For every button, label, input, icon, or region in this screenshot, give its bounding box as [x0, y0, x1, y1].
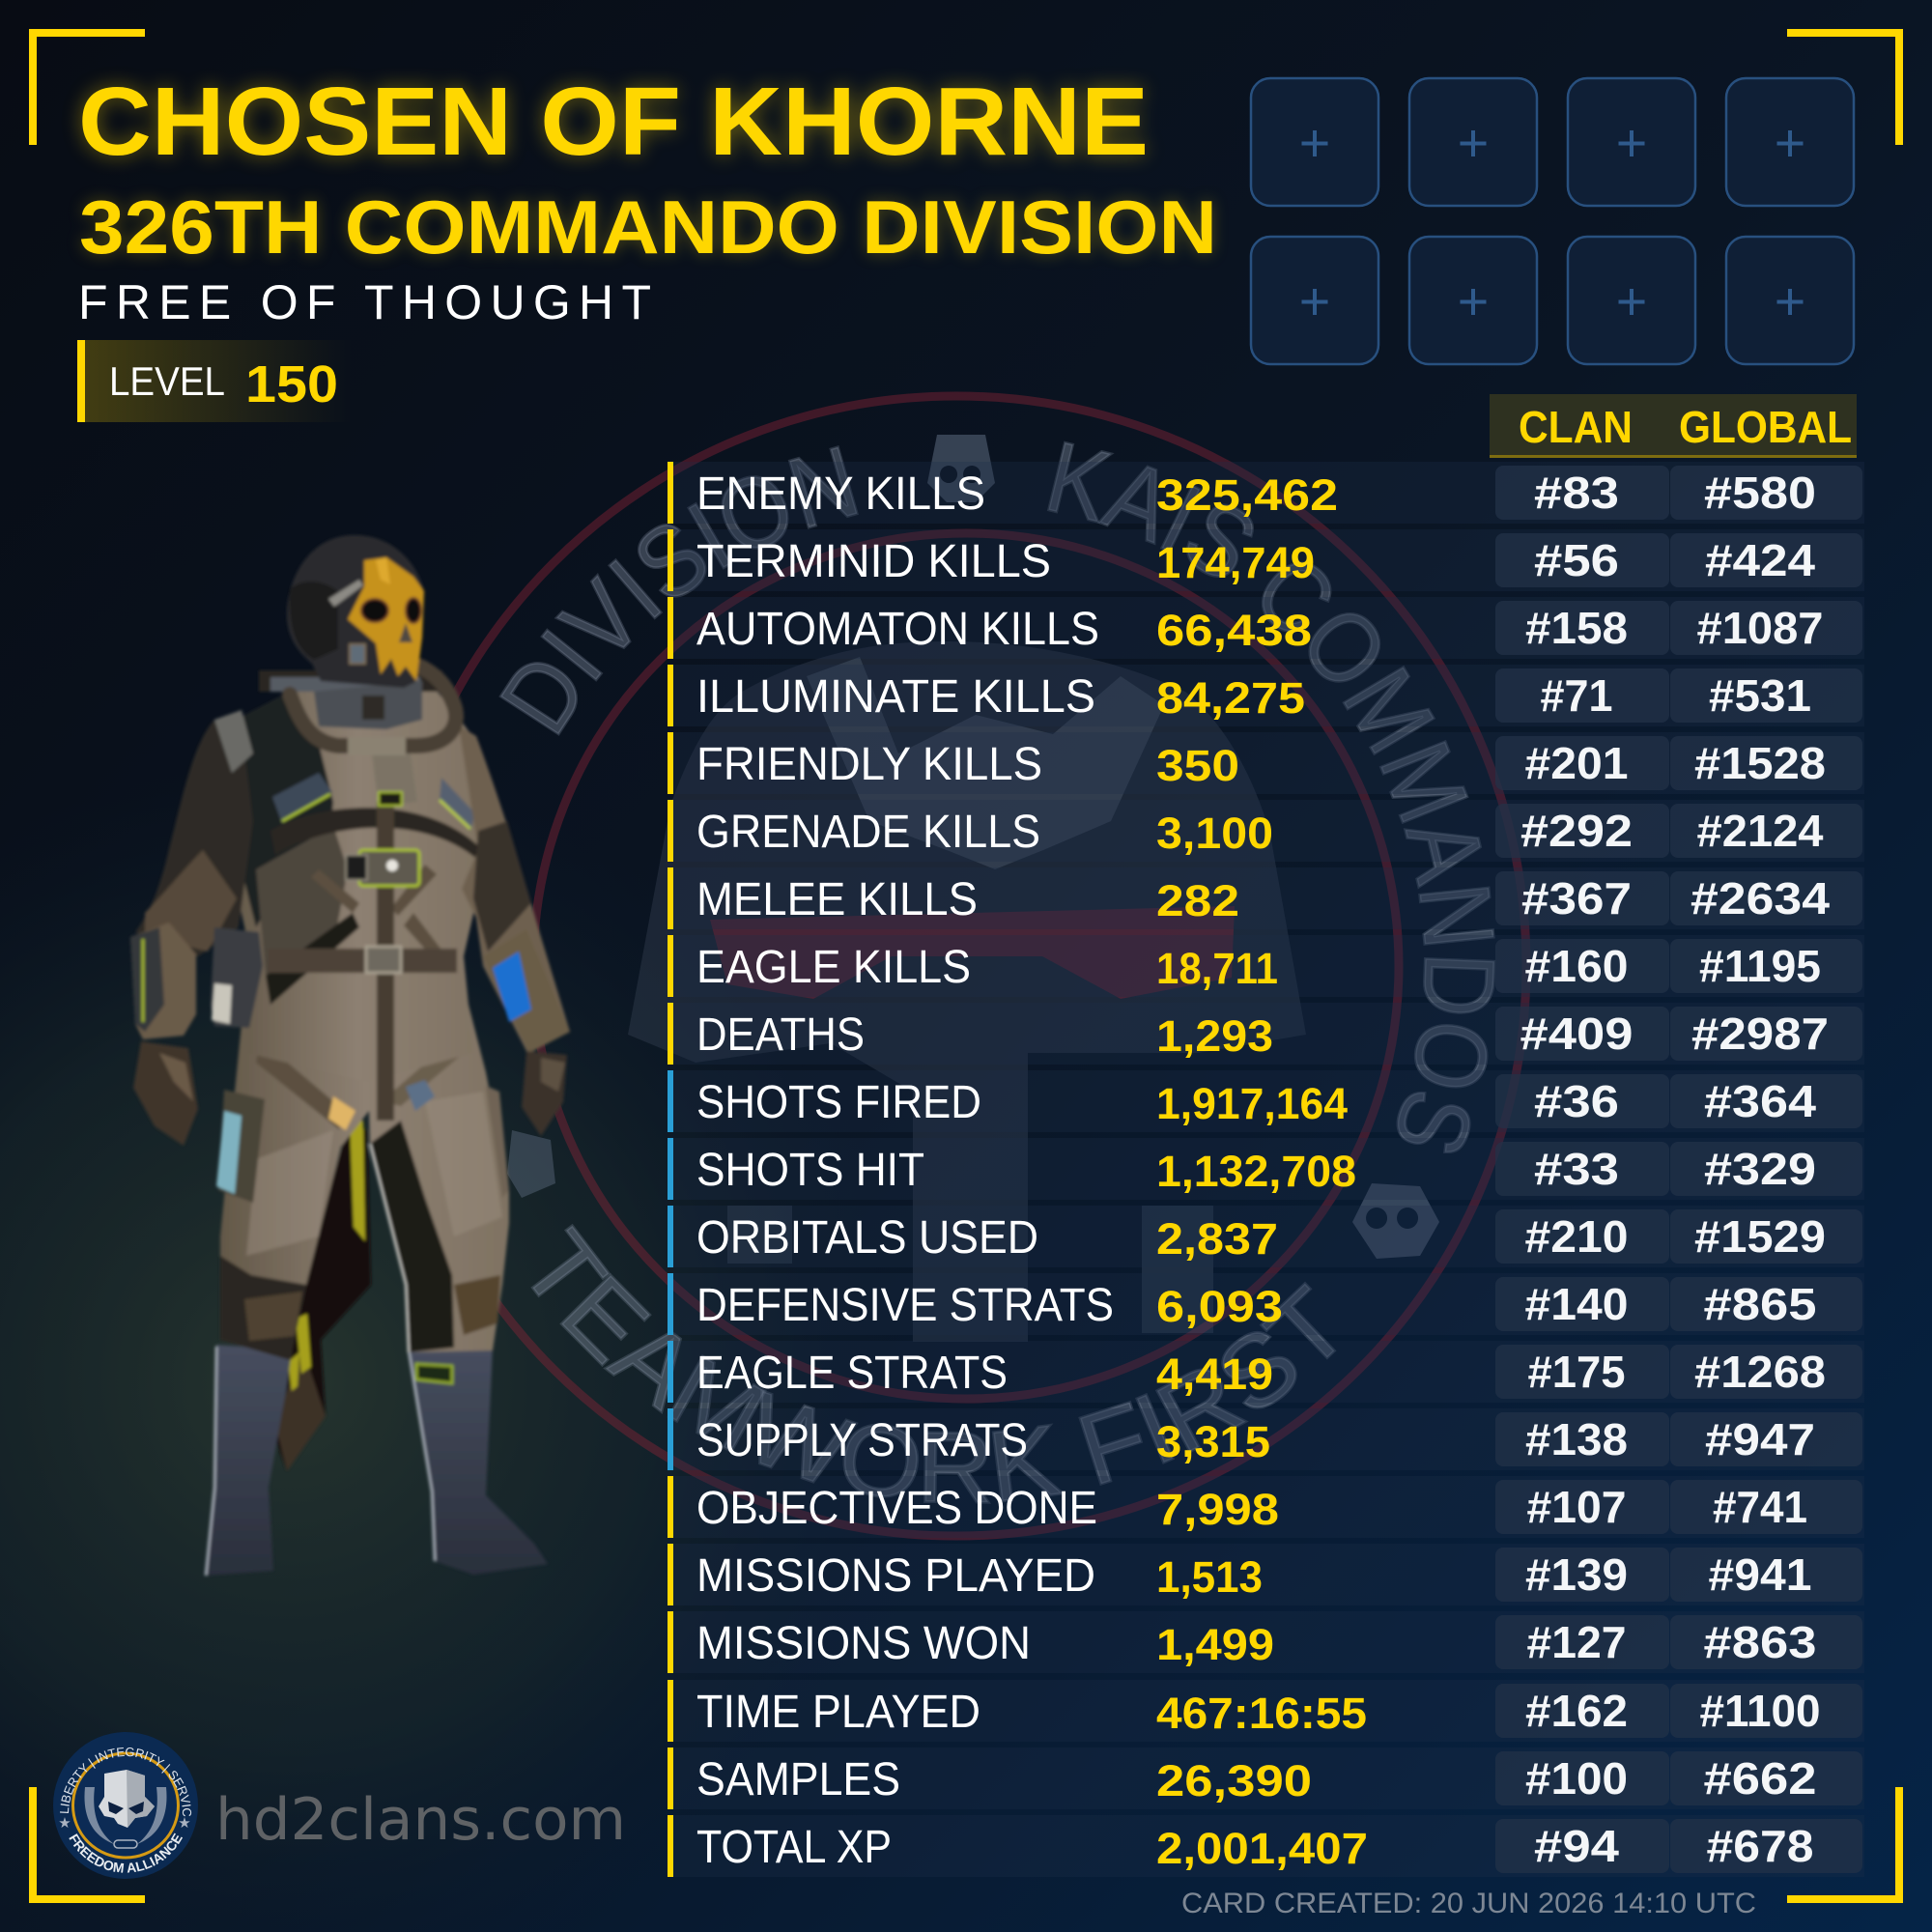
row: time played — [668, 1680, 1864, 1742]
row: enemy kills: #83 — [1534, 468, 1619, 518]
global column heading: GLOBAL — [1679, 402, 1852, 452]
watermark emblem: DIVISION — [498, 445, 859, 736]
row: total xp: 2,001,407 — [1156, 1824, 1368, 1873]
row: automaton kills — [668, 597, 1864, 659]
watermark emblem: KAIS COMMANDOS — [1047, 440, 1495, 1153]
row: objectives done: 7,998 — [1156, 1485, 1279, 1534]
row: automaton kills: 66,438 — [1156, 606, 1312, 655]
row: eagle strats — [668, 1341, 1864, 1403]
row: eagle kills: 18,711 — [1156, 944, 1278, 993]
row: objectives done: #741 — [1713, 1482, 1807, 1532]
left glove — [133, 1041, 198, 1146]
corner bracket: top left — [29, 29, 145, 145]
row: friendly kills: FRIENDLY KILLS — [696, 739, 1042, 790]
row: samples: #662 — [1704, 1753, 1816, 1804]
row: missions won — [668, 1611, 1864, 1673]
row: samples: #100 — [1525, 1753, 1628, 1804]
row: time played: #1100 — [1700, 1686, 1820, 1736]
row: illuminate kills — [668, 665, 1864, 726]
row: deaths: #2987 — [1691, 1009, 1829, 1059]
row: samples — [668, 1747, 1864, 1809]
row: shots hit: #33 — [1534, 1144, 1619, 1194]
row: orbitals used — [668, 1206, 1864, 1267]
row: eagle strats: 4,419 — [1156, 1350, 1273, 1399]
row: shots fired: #36 — [1534, 1076, 1619, 1126]
row: missions played: #139 — [1525, 1549, 1628, 1600]
mask eyes — [361, 599, 388, 622]
right arm — [459, 725, 570, 1053]
row: shots hit: 1,132,708 — [1156, 1147, 1356, 1196]
row: automaton kills: #158 — [1525, 603, 1628, 653]
row: supply strats: #947 — [1705, 1414, 1815, 1464]
row: eagle strats: #175 — [1528, 1347, 1625, 1397]
shoulder pads — [272, 773, 332, 823]
row: samples: 26,390 — [1156, 1756, 1312, 1805]
row: missions won: 1,499 — [1156, 1620, 1274, 1669]
row: defensive strats — [668, 1273, 1864, 1335]
row: eagle strats: EAGLE STRATS — [696, 1348, 1008, 1399]
row: eagle strats: #1268 — [1694, 1347, 1826, 1397]
row: objectives done: #107 — [1526, 1482, 1627, 1532]
row: missions won: #863 — [1704, 1617, 1816, 1667]
harness — [270, 808, 488, 869]
row: defensive strats: DEFENSIVE STRATS — [696, 1280, 1114, 1331]
row: total xp: #94 — [1534, 1821, 1619, 1871]
row: orbitals used: #1529 — [1694, 1211, 1826, 1262]
row: melee kills — [668, 867, 1864, 929]
level label: LEVEL — [109, 358, 225, 404]
watermark emblem: TEAMWORK FIRST — [531, 1224, 1337, 1504]
row: defensive strats: #140 — [1524, 1279, 1629, 1329]
watermark emblem — [454, 392, 1530, 1540]
pouch — [211, 927, 263, 1028]
row: illuminate kills: 84,275 — [1156, 673, 1305, 723]
row: grenade kills: #2124 — [1696, 806, 1824, 856]
row: enemy kills: 325,462 — [1156, 470, 1338, 520]
row: terminid kills: TERMINID KILLS — [696, 536, 1051, 587]
row: missions won: MISSIONS WON — [696, 1618, 1031, 1669]
row: shots fired — [668, 1070, 1864, 1132]
row: eagle kills: #160 — [1524, 941, 1629, 991]
row: total xp — [668, 1815, 1864, 1877]
laurel — [84, 1787, 167, 1844]
tagline: FREE OF THOUGHT — [78, 275, 651, 329]
row: terminid kills — [668, 529, 1864, 591]
row: friendly kills: 350 — [1156, 741, 1239, 790]
left arm — [135, 720, 253, 956]
row: deaths: 1,293 — [1156, 1011, 1273, 1061]
row: deaths: #409 — [1520, 1009, 1633, 1059]
row: defensive strats: #865 — [1704, 1279, 1816, 1329]
row: eagle kills: #1195 — [1699, 941, 1821, 991]
row: eagle kills — [668, 935, 1864, 997]
level value: 150 — [245, 355, 338, 413]
row: terminid kills: #424 — [1705, 535, 1815, 585]
row: friendly kills: #201 — [1524, 738, 1629, 788]
row: eagle kills: EAGLE KILLS — [696, 942, 971, 993]
row: missions played: MISSIONS PLAYED — [696, 1550, 1095, 1602]
breathing tube — [290, 667, 456, 746]
row: melee kills: 282 — [1156, 876, 1239, 925]
row: missions won: #127 — [1526, 1617, 1627, 1667]
row: melee kills: MELEE KILLS — [696, 874, 978, 925]
row: shots fired: SHOTS FIRED — [696, 1077, 981, 1128]
row: illuminate kills: ILLUMINATE KILLS — [696, 671, 1095, 723]
row: deaths — [668, 1003, 1864, 1065]
row: friendly kills: #1528 — [1694, 738, 1826, 788]
row: orbitals used: ORBITALS USED — [696, 1212, 1038, 1264]
row: enemy kills: ENEMY KILLS — [696, 469, 985, 520]
row: supply strats: 3,315 — [1156, 1417, 1270, 1466]
row: grenade kills: 3,100 — [1156, 809, 1273, 858]
row: deaths: DEATHS — [696, 1009, 865, 1061]
row: objectives done: OBJECTIVES DONE — [696, 1483, 1097, 1534]
boots — [206, 1345, 292, 1576]
helmet — [287, 535, 424, 688]
row: melee kills: #367 — [1521, 873, 1632, 923]
website url: hd2clans.com — [215, 1786, 626, 1854]
row: supply strats: #138 — [1525, 1414, 1628, 1464]
row: objectives done — [668, 1476, 1864, 1538]
stars: ★ — [178, 1815, 191, 1832]
corner bracket: top right — [1787, 29, 1903, 145]
clan column heading: CLAN — [1519, 402, 1633, 452]
soldier figure — [130, 535, 570, 1576]
row: enemy kills — [668, 462, 1864, 524]
row: shots fired: 1,917,164 — [1156, 1079, 1348, 1128]
chest plate — [372, 753, 417, 807]
row: grenade kills — [668, 800, 1864, 862]
corner bracket: bottom right — [1787, 1787, 1903, 1903]
row: illuminate kills: #71 — [1540, 670, 1613, 721]
row: time played: #162 — [1525, 1686, 1628, 1736]
chain glyph — [114, 1840, 137, 1848]
row: grenade kills: #292 — [1520, 806, 1633, 856]
row: illuminate kills: #531 — [1709, 670, 1811, 721]
row: automaton kills: AUTOMATON KILLS — [696, 604, 1099, 655]
legs — [220, 1005, 509, 1360]
row: samples: SAMPLES — [696, 1754, 900, 1805]
row: defensive strats: 6,093 — [1156, 1282, 1283, 1331]
title: CHOSEN OF KHORNE — [78, 68, 1149, 176]
rank table header — [1490, 394, 1857, 458]
row: missions played: 1,513 — [1156, 1552, 1263, 1602]
torso — [227, 676, 488, 1082]
row: melee kills: #2634 — [1690, 873, 1830, 923]
row: missions played — [668, 1544, 1864, 1605]
row: total xp: #678 — [1706, 1821, 1814, 1871]
row: shots hit: SHOTS HIT — [696, 1145, 924, 1196]
row: grenade kills: GRENADE KILLS — [696, 807, 1040, 858]
row: friendly kills — [668, 732, 1864, 794]
row: enemy kills: #580 — [1704, 468, 1816, 518]
right glove — [522, 1051, 567, 1136]
cape — [273, 1121, 371, 1471]
corner bracket: bottom left — [29, 1787, 145, 1903]
belt — [268, 949, 457, 973]
row: missions played: #941 — [1708, 1549, 1812, 1600]
row: time played: TIME PLAYED — [696, 1687, 980, 1738]
thigh pouch — [218, 1090, 265, 1203]
logo text: motto: LIBERTY | INTEGRITY | SERVICE — [60, 1747, 191, 1816]
row: total xp: TOTAL XP — [696, 1822, 892, 1873]
zipper — [377, 802, 394, 1121]
row: terminid kills: 174,749 — [1156, 538, 1315, 587]
straps and buckles — [256, 1038, 340, 1130]
row: orbitals used: 2,837 — [1156, 1214, 1278, 1264]
chest badge — [359, 850, 419, 886]
skull — [99, 1770, 155, 1828]
yellow straps — [350, 1121, 365, 1241]
row: supply strats: SUPPLY STRATS — [696, 1415, 1028, 1466]
row: shots hit — [668, 1138, 1864, 1200]
row: orbitals used: #210 — [1524, 1211, 1629, 1262]
shoulder yoke band — [259, 670, 442, 692]
subtitle: division: 326TH COMMANDO DIVISION — [79, 185, 1217, 270]
yellow mask — [348, 557, 424, 681]
stars: ★ — [58, 1815, 71, 1832]
logo text: freedom alliance: FREEDOM ALLIANCE — [69, 1833, 183, 1873]
row: terminid kills: #56 — [1534, 535, 1619, 585]
clan logo badge — [53, 1732, 198, 1879]
row: shots fired: #364 — [1704, 1076, 1816, 1126]
row: time played: 467:16:55 — [1156, 1689, 1367, 1738]
card created timestamp: CARD CREATED: 20 JUN 2026 14:10 UTC — [1181, 1888, 1756, 1919]
badge slots grid — [1251, 78, 1854, 364]
neck collar — [314, 681, 422, 729]
row: automaton kills: #1087 — [1696, 603, 1824, 653]
row: shots hit: #329 — [1704, 1144, 1816, 1194]
row: supply strats — [668, 1408, 1864, 1470]
level badge — [77, 340, 353, 422]
